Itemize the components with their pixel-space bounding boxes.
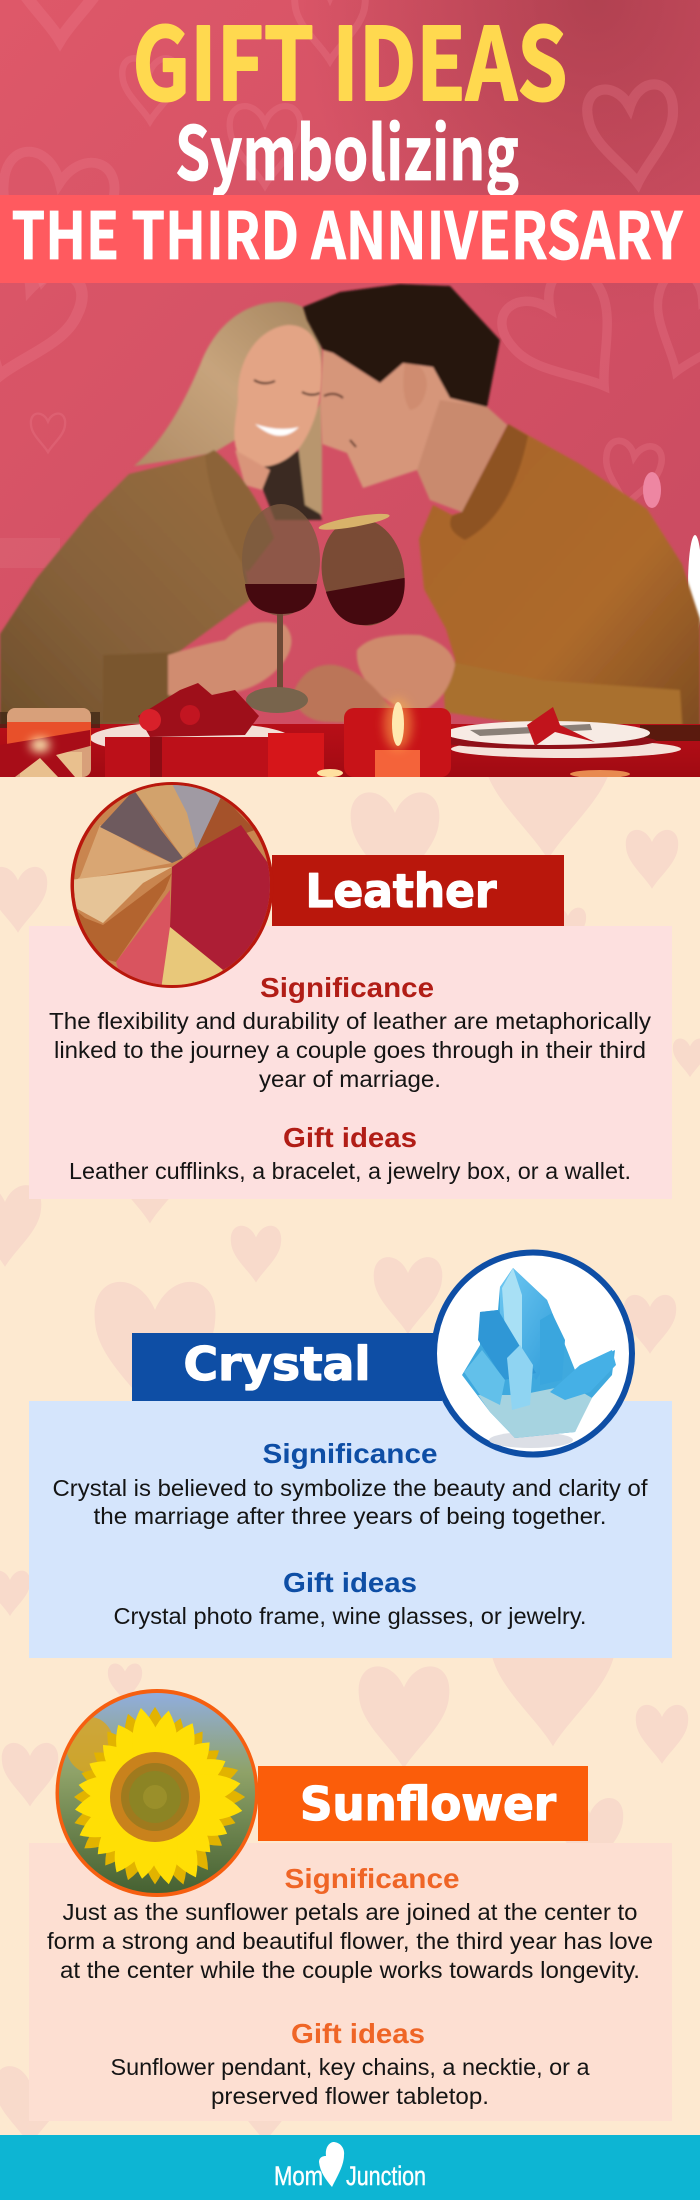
- text block: significance: [52, 1475, 648, 1529]
- text block: significance: linked to the journey a couple goes through in their third: [54, 1037, 646, 1063]
- text block: significance: at the center while the couple works towards longevity.: [60, 1957, 640, 1983]
- leather banner: [272, 855, 564, 926]
- heading: significance: Significance: [284, 1863, 460, 1894]
- text block: significance: year of marriage.: [259, 1066, 441, 1092]
- icon: sunflower: [56, 1689, 259, 1897]
- heading: significance: Significance: [262, 1438, 438, 1469]
- middle candle: [344, 708, 451, 777]
- text block: gift ideas: preserved flower tabletop.: [211, 2083, 489, 2109]
- heading: gift ideas: Gift ideas: [291, 2018, 425, 2049]
- icon: blue crystal: [434, 1252, 632, 1454]
- leather banner: Leather: [306, 864, 497, 918]
- crystal banner: Crystal: [184, 1337, 370, 1391]
- text block: significance: Crystal is believed to symbolize the beauty and clarity of: [52, 1475, 648, 1501]
- table with candles, gift and plates: [0, 683, 700, 778]
- man: [292, 284, 700, 742]
- text block: gift ideas: [110, 2054, 590, 2109]
- text block: significance: form a strong and beautiful flower, the third year has love: [47, 1928, 653, 1954]
- wine glasses: [242, 504, 413, 713]
- gift box and bow: [268, 733, 324, 777]
- text block: significance: Just as the sunflower petals are joined at the center to: [62, 1899, 638, 1925]
- heading: significance: Significance: [260, 972, 434, 1003]
- text block: significance: [49, 1008, 652, 1092]
- text block: gift ideas: Leather cufflinks, a bracelet, a jewelry box, or a wallet.: [69, 1158, 631, 1184]
- left plate: [91, 724, 285, 746]
- text block: significance: [47, 1899, 653, 1983]
- crystal banner: [132, 1333, 442, 1401]
- left candle: [7, 708, 91, 777]
- footer with MomJunction logo: [0, 2135, 700, 2200]
- sunflower banner: [258, 1766, 588, 1841]
- logo text: Junction: Junction: [346, 2161, 426, 2191]
- logo text: Mom: [274, 2161, 323, 2191]
- heading: gift ideas: Gift ideas: [283, 1567, 417, 1598]
- faint heart outlines: [0, 0, 700, 510]
- right plates: [451, 743, 681, 758]
- icon: leather swatches: [70, 780, 280, 990]
- panel: sunflower: [29, 1689, 672, 2121]
- hero photo: couple toasting: [0, 0, 700, 778]
- text block: gift ideas: Crystal photo frame, wine glasses, or jewelry.: [114, 1603, 586, 1629]
- woman: [0, 302, 322, 735]
- panel: leather: [29, 780, 672, 1199]
- heading: gift ideas: Gift ideas: [283, 1122, 417, 1153]
- logo icon: [319, 2142, 344, 2187]
- text block: gift ideas: Sunflower pendant, key chains, a necktie, or a: [110, 2054, 590, 2080]
- title: Symbolizing: Symbolizing: [175, 95, 519, 202]
- panel: crystal: [29, 1252, 672, 1658]
- cream background with hearts: [0, 712, 700, 2200]
- text block: significance: the marriage after three years of being together.: [94, 1503, 606, 1529]
- sunflower banner: Sunflower: [300, 1777, 556, 1831]
- text block: significance: The flexibility and durability of leather are metaphorically: [49, 1008, 652, 1034]
